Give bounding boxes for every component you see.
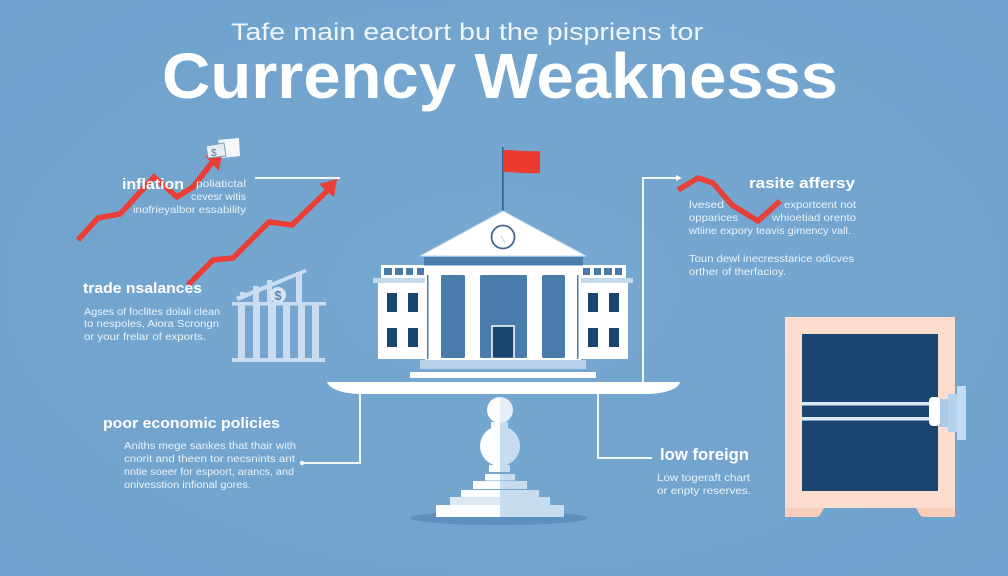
text: right panel: orther of therfacioy. xyxy=(689,266,786,278)
pedestal xyxy=(410,397,588,525)
clock xyxy=(492,226,514,248)
right wing xyxy=(580,265,633,359)
text: poor economic policies: onivesstion infional gores. xyxy=(124,479,251,491)
line: top right arrow xyxy=(643,178,676,382)
roof xyxy=(236,269,307,301)
text: trade imbalances: to nespoles, Aiora Scrongn xyxy=(84,318,219,330)
safe body xyxy=(785,317,955,508)
portico xyxy=(424,257,583,360)
body: low foreign: Low togeraft chart xyxy=(657,472,750,484)
handle xyxy=(929,386,966,440)
columns xyxy=(238,305,319,358)
heading: low foreign: low foreign xyxy=(660,445,749,464)
body: inflation: poliatictal xyxy=(196,178,246,190)
main title: Currency Weaknesss xyxy=(162,40,838,112)
text: right panel: wtiine expory teavis gimency vall. xyxy=(688,225,851,237)
red trend arrow: inflation xyxy=(78,153,222,240)
heading: right: rasite affersy xyxy=(749,175,856,192)
text: right panel: exportcent not xyxy=(784,199,856,211)
subtitle: Tafe main eactort bu the pispriens tor xyxy=(231,19,703,46)
text: poor economic policies: nntie soeer for espoort, arancs, and xyxy=(124,466,294,478)
text: low foreign: or enpty reserves. xyxy=(657,485,751,497)
left wing xyxy=(373,265,429,359)
central bank building xyxy=(373,211,633,378)
line: lower right xyxy=(598,392,652,458)
safe interior xyxy=(802,334,938,491)
text: right panel: opparices xyxy=(689,212,738,224)
text: inflation xyxy=(122,176,247,216)
body: right: lvesed xyxy=(689,199,724,211)
steps xyxy=(410,360,596,378)
text: inflation: inofrieyalbor essability xyxy=(133,204,247,216)
dot: lower left end xyxy=(300,461,304,465)
shelf bars xyxy=(802,402,932,420)
line: lower left xyxy=(302,392,360,463)
left half xyxy=(436,397,500,517)
right half xyxy=(500,397,564,517)
heading: trade: trade nsalances xyxy=(83,280,202,297)
dollar badge xyxy=(270,287,286,303)
balance platform xyxy=(327,382,680,394)
connector lines xyxy=(255,175,682,465)
text: inflation: cevesr witis xyxy=(191,191,246,203)
red trend arrow: trade imbalances xyxy=(188,179,337,285)
body: trade: Agses of foclites dolali clean xyxy=(84,306,220,318)
arrowhead: top right xyxy=(676,175,682,181)
text: low foreign xyxy=(657,445,751,497)
text: right panel xyxy=(688,175,856,278)
text: trade imbalances xyxy=(83,280,220,343)
text: right panel: whioetiad orento xyxy=(771,212,856,224)
text: trade imbalances: or your frelar of exports. xyxy=(84,331,206,343)
icon: flag xyxy=(502,147,540,211)
heading: inflation: inflation xyxy=(122,176,184,193)
door xyxy=(492,326,514,358)
title block xyxy=(162,19,838,112)
text: right panel: Toun dewl inecresstarice odicves xyxy=(689,253,854,265)
text: poor economic policies: cnorit and theen tor necsnints ant xyxy=(124,453,295,465)
icon: empty safe xyxy=(785,317,966,517)
beam xyxy=(232,302,326,306)
icon: banknotes: $ xyxy=(211,148,217,159)
shadow xyxy=(410,511,588,525)
red trend line: right xyxy=(678,178,780,221)
text: poor economic policies xyxy=(103,415,296,491)
base xyxy=(232,358,325,362)
body: policies: Aniths mege sankes that thair with xyxy=(124,440,296,452)
safe feet xyxy=(785,508,955,517)
pediment xyxy=(420,211,586,256)
icon: small bank: $ xyxy=(274,288,282,303)
icon: banknotes xyxy=(206,138,240,159)
line: top left rule xyxy=(255,177,340,179)
heading: policies: poor economic policies xyxy=(103,415,280,432)
icon: small bank xyxy=(232,269,326,362)
